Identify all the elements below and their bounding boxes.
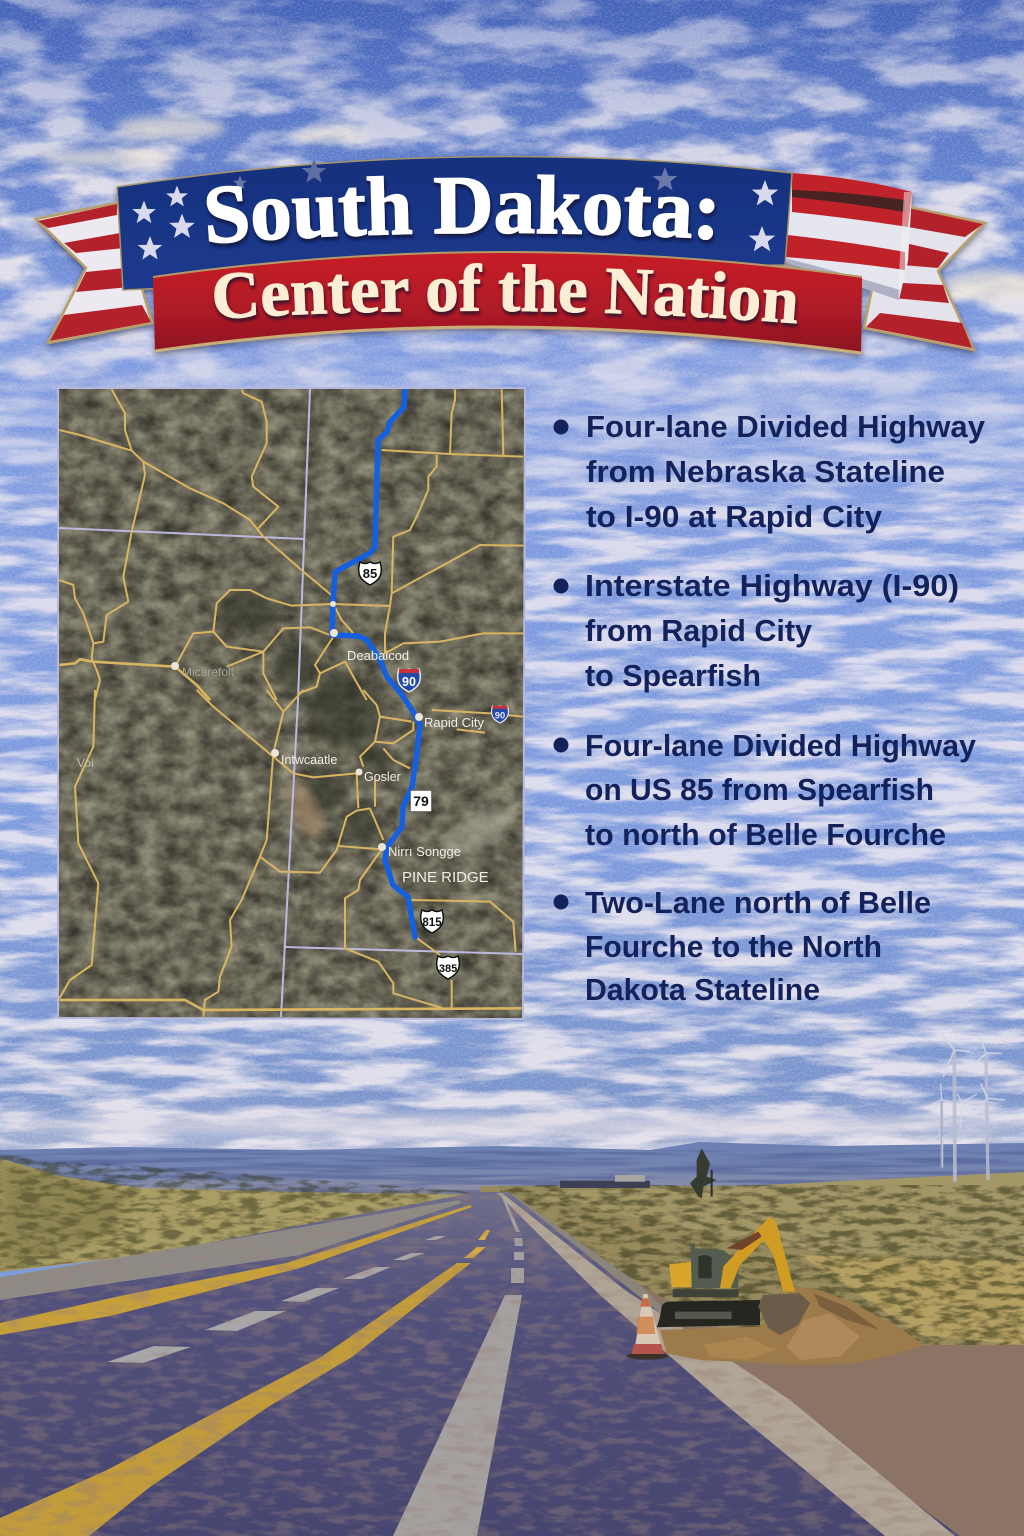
banner: right ribbon tail	[864, 207, 985, 350]
shield: US 385: 385	[439, 963, 457, 975]
bullet 2: I-90 to Spearfish: from Rapid City	[585, 614, 812, 648]
banner: stars	[132, 159, 778, 260]
icon: excavator	[657, 1217, 810, 1335]
bullet 4: two-lane to North Dakota	[554, 886, 931, 1007]
shield: I-90: 90	[402, 675, 416, 689]
excavator cab	[691, 1243, 738, 1288]
bullet 1: Nebraska to I-90: to I-90 at Rapid City	[586, 500, 882, 534]
distant tree and farm	[560, 1148, 717, 1198]
shield: I-90	[398, 669, 420, 692]
shield: small I-90	[492, 706, 508, 723]
map state boundaries	[59, 389, 522, 1017]
main yellow line	[0, 1263, 471, 1536]
bullet 3: US 85 to Belle Fourche: on US 85 from Spearfish	[585, 773, 934, 807]
map city labels: Intwcaatle	[281, 753, 337, 767]
bullet 3: US 85 to Belle Fourche: Four-lane Divided Highway	[585, 729, 976, 763]
shield: US 815	[421, 910, 443, 933]
banner: left ribbon tail	[36, 203, 152, 343]
shield: route 79	[410, 790, 432, 812]
left yellow centre line	[0, 1205, 472, 1335]
bullet 1: Nebraska to I-90: from Nebraska Stateline	[586, 455, 945, 489]
subtitle: Center of the Nation: Center of the Nation	[213, 263, 800, 329]
excavator tracks	[657, 1300, 760, 1327]
excavator body	[669, 1262, 693, 1287]
map city labels: Rapid City	[424, 715, 484, 730]
map roads north	[59, 389, 523, 700]
map terrain	[59, 389, 525, 1019]
panel: highway map	[57, 387, 526, 1020]
road shoulder	[0, 1200, 462, 1300]
banner: striped flag fold	[785, 173, 912, 300]
bullet list: route segments	[554, 410, 985, 1007]
map city labels: Deabaicod	[347, 648, 409, 663]
bullet 1: Nebraska to I-90: Four-lane Divided Highway	[586, 410, 985, 444]
map city labels: Micarefolt	[182, 665, 235, 679]
bullet 3: US 85 to Belle Fourche	[554, 729, 976, 852]
banner: navy field	[117, 156, 792, 290]
lane dashes	[107, 1236, 446, 1363]
bullet 4: two-lane to North Dakota: Two-Lane north of Belle	[585, 886, 931, 920]
bullet 4: two-lane to North Dakota: Fourche to the North	[585, 930, 882, 964]
bullet 3: US 85 to Belle Fourche: to north of Belle Fourche	[585, 818, 946, 852]
title banner	[32, 155, 989, 361]
dirt pile	[660, 1287, 923, 1365]
bullet 2: I-90 to Spearfish: Interstate Highway (I-90)	[585, 569, 959, 603]
map city labels	[77, 648, 489, 886]
landscape: road	[0, 1190, 1024, 1536]
landscape: horizon hills	[0, 1142, 1024, 1200]
right edge line	[497, 1193, 955, 1536]
background: cloudy sky	[0, 0, 1024, 1190]
centre white line	[393, 1198, 524, 1536]
highlighted blue route	[332, 389, 420, 937]
shield: US 385	[437, 956, 459, 979]
icon: traffic cone	[627, 1294, 668, 1360]
excavator boom	[720, 1217, 795, 1292]
shield: small I-90: 90	[495, 710, 505, 721]
shield: US 85: 85	[363, 566, 377, 581]
map city labels: Voi	[77, 756, 94, 770]
title: South Dakota: South Dakota:	[206, 174, 718, 248]
map highway shields	[359, 562, 508, 979]
bullet 2: I-90 to Spearfish	[554, 569, 959, 693]
map roads south	[59, 690, 523, 1017]
shield: US 85	[359, 562, 381, 585]
map city labels: Nirrı Songge	[388, 844, 461, 859]
map city labels: Gosler	[364, 770, 401, 784]
shield: US 815: 815	[422, 917, 442, 929]
bullet 1: Nebraska to I-90	[554, 410, 985, 534]
icon: wind turbines	[925, 1033, 1005, 1182]
bullet 2: I-90 to Spearfish: to Spearfish	[585, 659, 761, 693]
map city labels: PINE RIDGE	[402, 869, 489, 886]
map city dots	[171, 601, 423, 851]
banner: red band	[153, 252, 862, 353]
excavator bucket	[758, 1293, 810, 1335]
bullet 4: two-lane to North Dakota: Dakota Stateline	[585, 973, 820, 1007]
landscape: grass and dirt fields	[0, 1156, 1024, 1345]
shield: route 79: 79	[413, 793, 429, 809]
